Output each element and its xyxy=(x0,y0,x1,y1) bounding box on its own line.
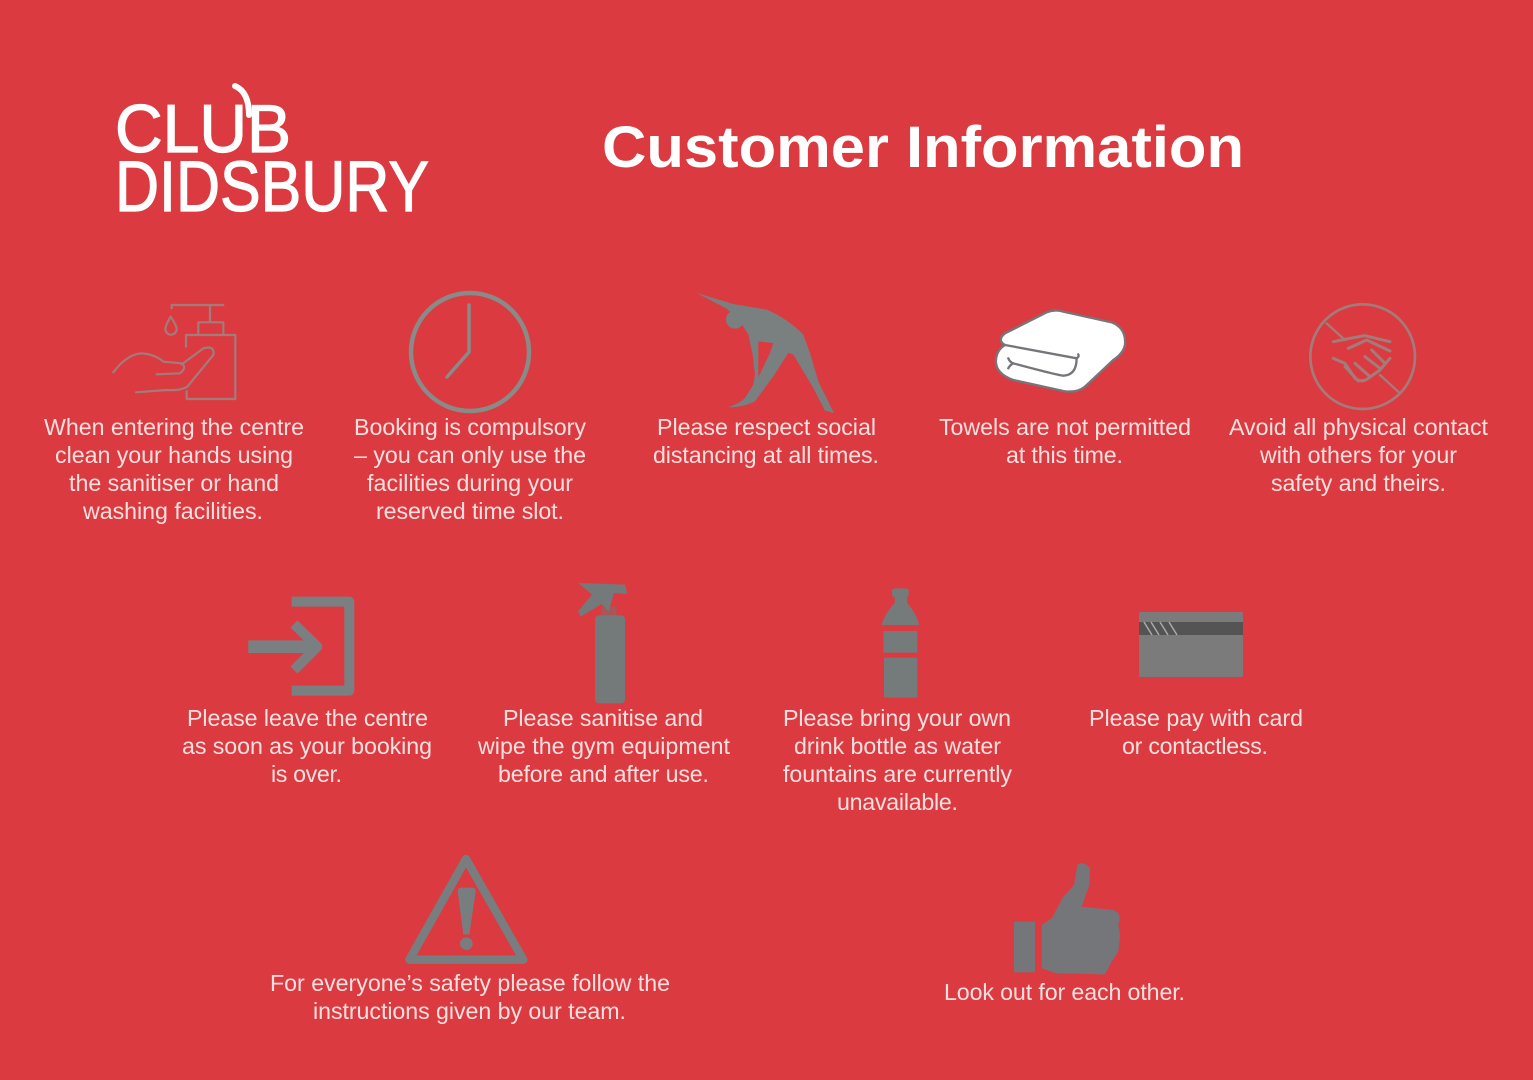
logo: Club Didsbury xyxy=(115,86,429,227)
panel: booking xyxy=(354,293,586,524)
icon: folded towel xyxy=(996,310,1125,392)
panel: look out xyxy=(944,863,1185,1005)
text: booking xyxy=(354,414,586,524)
text: hand sanitiser: When entering the centre xyxy=(44,414,304,440)
text: leave the centre xyxy=(182,705,432,787)
panel: card payment xyxy=(1089,612,1303,759)
text: sanitise equipment: Please sanitise and xyxy=(503,705,703,731)
panel: follow instructions xyxy=(270,859,670,1024)
text: towels xyxy=(939,414,1191,468)
text: booking: reserved time slot. xyxy=(376,498,564,524)
icon: warning triangle xyxy=(409,859,523,960)
text: avoid physical contact: Avoid all physical contact xyxy=(1229,414,1489,440)
panel: leave the centre xyxy=(182,602,432,787)
text: avoid physical contact: with others for your xyxy=(1259,442,1457,468)
text: drink bottle: Please bring your own xyxy=(783,705,1011,731)
text: leave the centre: as soon as your booking xyxy=(182,733,432,759)
icon: water bottle xyxy=(882,588,919,698)
text: social distancing: distancing at all times. xyxy=(653,442,879,468)
icon: exit arrow xyxy=(248,602,349,691)
icon: hand and soap dispenser xyxy=(113,305,235,399)
text: booking: facilities during your xyxy=(367,470,573,496)
text: hand sanitiser: clean your hands using xyxy=(55,442,293,468)
title: Customer Information xyxy=(602,115,1244,180)
text: drink bottle: fountains are currently xyxy=(783,761,1012,787)
text: leave the centre: is over. xyxy=(271,761,342,787)
text: sanitise equipment: before and after use. xyxy=(498,761,709,787)
text: booking: – you can only use the xyxy=(354,442,586,468)
text: towels: Towels are not permitted xyxy=(939,414,1191,440)
panel: towels xyxy=(939,310,1191,468)
panel: sanitise equipment xyxy=(477,583,731,787)
icon: clock xyxy=(411,293,529,411)
text: towels: at this time. xyxy=(1006,442,1123,468)
text: sanitise equipment xyxy=(477,705,731,787)
icon: crossed-out handshake xyxy=(1310,304,1415,409)
text: avoid physical contact: safety and theirs. xyxy=(1271,470,1446,496)
text: booking: Booking is compulsory xyxy=(354,414,586,440)
text: card payment: Please pay with card xyxy=(1089,705,1303,731)
logo: Club Didsbury: DIDSBURY xyxy=(115,148,429,227)
icon: thumbs up xyxy=(1014,863,1120,974)
text: drink bottle: drink bottle as water xyxy=(794,733,1001,759)
text: drink bottle xyxy=(783,705,1012,815)
text: card payment: or contactless. xyxy=(1122,733,1268,759)
icon: stretching figure xyxy=(697,293,834,413)
text: follow instructions: For everyone’s safety please follow the xyxy=(270,970,670,996)
text: hand sanitiser: washing facilities. xyxy=(82,498,263,524)
text: social distancing xyxy=(653,414,879,468)
panel: drink bottle xyxy=(783,588,1012,815)
text: follow instructions xyxy=(270,970,670,1024)
icon: bank card xyxy=(1139,612,1243,677)
text: follow instructions: instructions given by our team. xyxy=(313,998,626,1024)
text: look out: Look out for each other. xyxy=(944,979,1185,1005)
icon: spray bottle xyxy=(578,583,627,703)
text: sanitise equipment: wipe the gym equipment xyxy=(477,733,731,759)
logo: Club Didsbury: CLUB xyxy=(115,91,291,167)
text: hand sanitiser: the sanitiser or hand xyxy=(69,470,279,496)
text: leave the centre: Please leave the centre xyxy=(187,705,428,731)
text: avoid physical contact xyxy=(1229,414,1489,496)
text: drink bottle: unavailable. xyxy=(837,789,958,815)
text: social distancing: Please respect social xyxy=(657,414,876,440)
panel: avoid physical contact xyxy=(1229,304,1489,496)
text: hand sanitiser xyxy=(44,414,304,524)
text: card payment xyxy=(1089,705,1303,759)
panel: social distancing xyxy=(653,293,879,468)
panel: hand sanitiser xyxy=(44,305,304,524)
